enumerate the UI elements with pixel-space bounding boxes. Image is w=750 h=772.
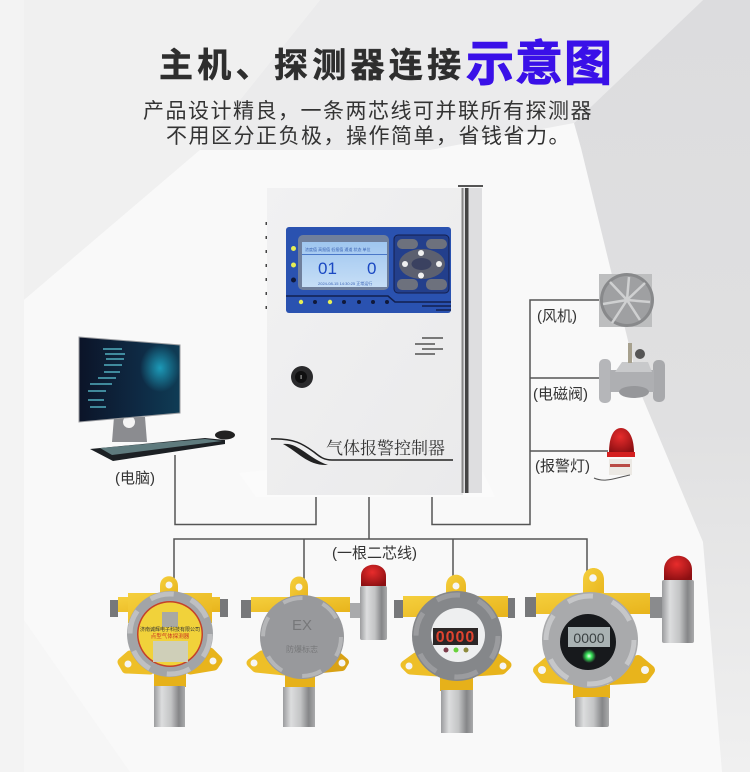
mounting tab [160, 576, 178, 596]
detector 2 [241, 565, 387, 727]
green glow [582, 649, 596, 663]
detector 3 [394, 575, 515, 733]
cabinet hinge strip [463, 188, 482, 493]
red LED display [433, 628, 478, 645]
ears [251, 655, 285, 671]
sensor tube [575, 697, 609, 727]
subtitle: 不用区分正负极，操作简单，省钱省力。 [166, 125, 571, 148]
detector 1: 济南诚辉电子科技有限公司 [140, 626, 200, 633]
detector 1 [110, 576, 228, 727]
lock [291, 366, 313, 388]
blue control panel: 2024-08-15 14:30:25 正常运行 [318, 280, 372, 286]
head [412, 591, 502, 681]
label: alarm light: (报警灯) [535, 458, 590, 475]
cabinet name: 气体报警控制器 [326, 438, 445, 458]
ears [122, 655, 150, 670]
mounting tab [290, 576, 308, 600]
title [159, 38, 613, 91]
icon: alarm beacon [594, 428, 635, 480]
teal glow [140, 344, 180, 392]
monitor [79, 337, 180, 422]
detector 2: EX [292, 617, 312, 634]
mounting tab [583, 568, 604, 600]
grey cover [260, 595, 344, 679]
label: solenoid valve: (电磁阀) [533, 386, 588, 403]
sensor tube [441, 690, 473, 733]
blue control panel: 01 [318, 259, 337, 278]
cabinet body [267, 188, 463, 495]
neck [573, 685, 610, 698]
blue control panel: 0 [367, 259, 376, 278]
detector 3: 0000 [436, 629, 475, 646]
subtitle: 产品设计精良，一条两芯线可并联所有探测器 [143, 100, 593, 123]
wiring lines [174, 300, 608, 582]
side lamp [662, 580, 694, 643]
code lines [88, 349, 125, 407]
blue control panel [286, 227, 451, 313]
sensor tube [154, 686, 185, 727]
neck [154, 674, 186, 687]
neck [285, 675, 315, 688]
LCD screen [302, 242, 387, 287]
stand notch [123, 416, 135, 428]
mounting tab [446, 575, 466, 598]
controller cabinet [239, 185, 495, 497]
shoulders [118, 597, 220, 612]
label: computer: (电脑) [115, 470, 155, 487]
label: fan: (风机) [537, 308, 577, 325]
sensor tube [283, 687, 315, 727]
cabinet vent marks [415, 338, 443, 354]
swoosh [271, 439, 453, 460]
cabinet shadow [239, 470, 495, 497]
detector 2: 防爆标志 [286, 644, 318, 654]
shoulders [251, 597, 350, 612]
LCD display [568, 627, 610, 647]
ears [538, 660, 574, 680]
detector 4: 0000 [573, 630, 605, 646]
head [127, 591, 213, 677]
LCD bezel [298, 235, 389, 290]
shoulders [536, 593, 650, 614]
icon: fan [599, 273, 654, 327]
mouse [215, 430, 235, 440]
ears [405, 657, 438, 672]
nut [241, 600, 251, 618]
bottom leds [299, 300, 303, 304]
shoulders [403, 596, 508, 617]
title blue part: 示意图 [466, 38, 613, 91]
blue control panel: 浓度值 高报值 低报值 通道 状态 单位 [305, 246, 371, 252]
side lamp [350, 603, 363, 618]
indicator lights [444, 648, 448, 652]
neck [440, 677, 473, 691]
keyboard [90, 438, 225, 461]
monitor stand [112, 417, 147, 442]
detector 4 [525, 556, 694, 727]
detector 1: 点型气体探测器 [151, 632, 190, 640]
label: two-core cable: (一根二芯线) [332, 545, 417, 562]
title dark part: 主机、探测器连接 [159, 47, 465, 85]
status leds [291, 246, 296, 251]
nuts [394, 600, 403, 618]
head [542, 592, 638, 688]
nuts [110, 600, 118, 617]
icon: solenoid valve [599, 343, 665, 403]
subtitle [143, 100, 593, 148]
computer [79, 337, 235, 461]
side vents [266, 222, 267, 309]
keypad [394, 235, 449, 293]
nuts [525, 597, 536, 617]
panel bottom stripe [286, 296, 451, 310]
